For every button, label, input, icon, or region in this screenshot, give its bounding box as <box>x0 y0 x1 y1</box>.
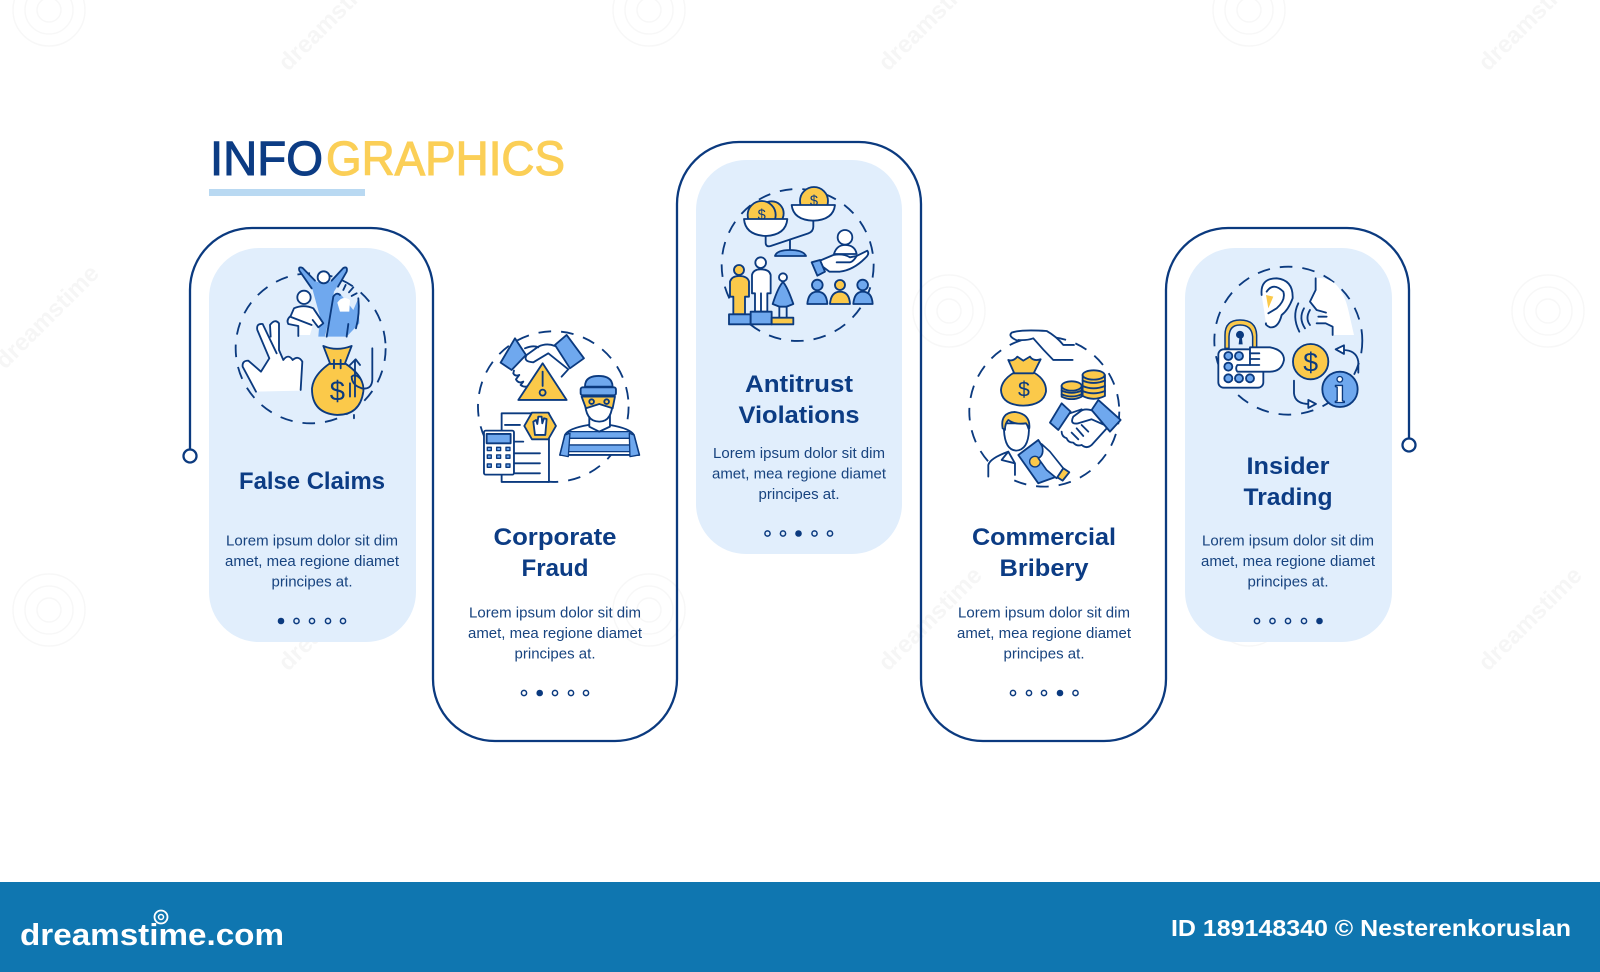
heading: false claims: False Claims <box>239 468 385 495</box>
heading: corporate fraud: Corporate <box>494 524 616 551</box>
heading: commercial bribery: Commercial <box>972 524 1116 551</box>
body text: amet, mea regione diamet <box>957 626 1131 642</box>
heading: insider trading: Insider <box>1246 453 1330 480</box>
frame end node <box>1402 438 1416 452</box>
icon: false claims: $ <box>330 376 345 407</box>
body text: principes at. <box>1004 646 1084 662</box>
heading: antitrust violations <box>738 371 860 429</box>
icon: commercial bribery <box>969 330 1121 487</box>
body text: Lorem ipsum dolor sit dim <box>1202 534 1374 550</box>
body text <box>1201 534 1375 590</box>
card: false claims text <box>225 468 399 624</box>
pagination dots <box>521 690 589 696</box>
panel: insider trading background <box>1185 248 1392 642</box>
icon: antitrust violations <box>722 187 874 341</box>
heading: insider trading: Trading <box>1244 484 1332 511</box>
title underline <box>209 189 365 196</box>
body text <box>468 606 642 662</box>
heading: commercial bribery: Bribery <box>1000 555 1089 582</box>
icon: insider trading: i <box>1334 371 1345 412</box>
body text: amet, mea regione diamet <box>468 626 642 642</box>
body text <box>957 606 1131 662</box>
pagination dots <box>765 530 833 537</box>
pagination dots <box>1254 618 1323 624</box>
footer band <box>0 882 1600 972</box>
icon: insider trading: $ <box>1303 348 1318 378</box>
heading: antitrust violations: Antitrust <box>745 371 853 398</box>
icon: antitrust violations: $ <box>758 207 766 223</box>
icon: commercial bribery: $ <box>1018 378 1030 402</box>
title: INFO <box>210 133 323 186</box>
icon: insider trading <box>1214 267 1362 415</box>
title <box>210 133 565 186</box>
body text: Lorem ipsum dolor sit dim <box>469 606 641 622</box>
text: dreamstime <box>873 562 988 676</box>
panel: antitrust violations background <box>696 160 902 554</box>
body text: amet, mea regione diamet <box>225 554 399 570</box>
continuous serpentine frame line <box>190 142 1409 741</box>
text: dreamstime <box>1473 562 1588 676</box>
card: antitrust violations text <box>712 371 886 537</box>
image id and author credit: ID 189148340 © Nesterenkoruslan <box>1171 915 1571 941</box>
body text: amet, mea regione diamet <box>712 466 886 482</box>
body text: principes at. <box>514 646 596 662</box>
frame start node <box>184 450 196 462</box>
heading: antitrust violations: Violations <box>738 402 860 429</box>
body text: principes at. <box>758 487 840 503</box>
body text: amet, mea regione diamet <box>1201 554 1375 570</box>
card: insider trading text <box>1201 453 1375 624</box>
body text <box>225 534 399 590</box>
pagination dots <box>1010 690 1078 696</box>
heading: corporate fraud: Fraud <box>522 555 588 582</box>
panel: false claims background <box>209 248 416 642</box>
logo: dreamstime.com: dreamstime.com <box>20 917 284 952</box>
heading: insider trading <box>1244 453 1332 511</box>
card: corporate fraud text <box>468 524 642 696</box>
body text: principes at. <box>272 574 352 590</box>
title: GRAPHICS <box>326 133 565 186</box>
text: dreamstime <box>273 562 388 676</box>
icon: antitrust violations: $ <box>810 193 818 209</box>
body text: principes at. <box>1248 574 1328 590</box>
body text: Lorem ipsum dolor sit dim <box>713 446 885 462</box>
icon: corporate fraud <box>478 331 639 482</box>
card: commercial bribery text <box>957 524 1131 696</box>
body text: Lorem ipsum dolor sit dim <box>958 606 1130 622</box>
pagination dots <box>278 618 346 624</box>
icon: false claims <box>236 267 386 423</box>
body text <box>712 446 886 503</box>
heading: corporate fraud <box>494 524 616 582</box>
heading: commercial bribery <box>972 524 1116 582</box>
body text: Lorem ipsum dolor sit dim <box>226 534 398 550</box>
